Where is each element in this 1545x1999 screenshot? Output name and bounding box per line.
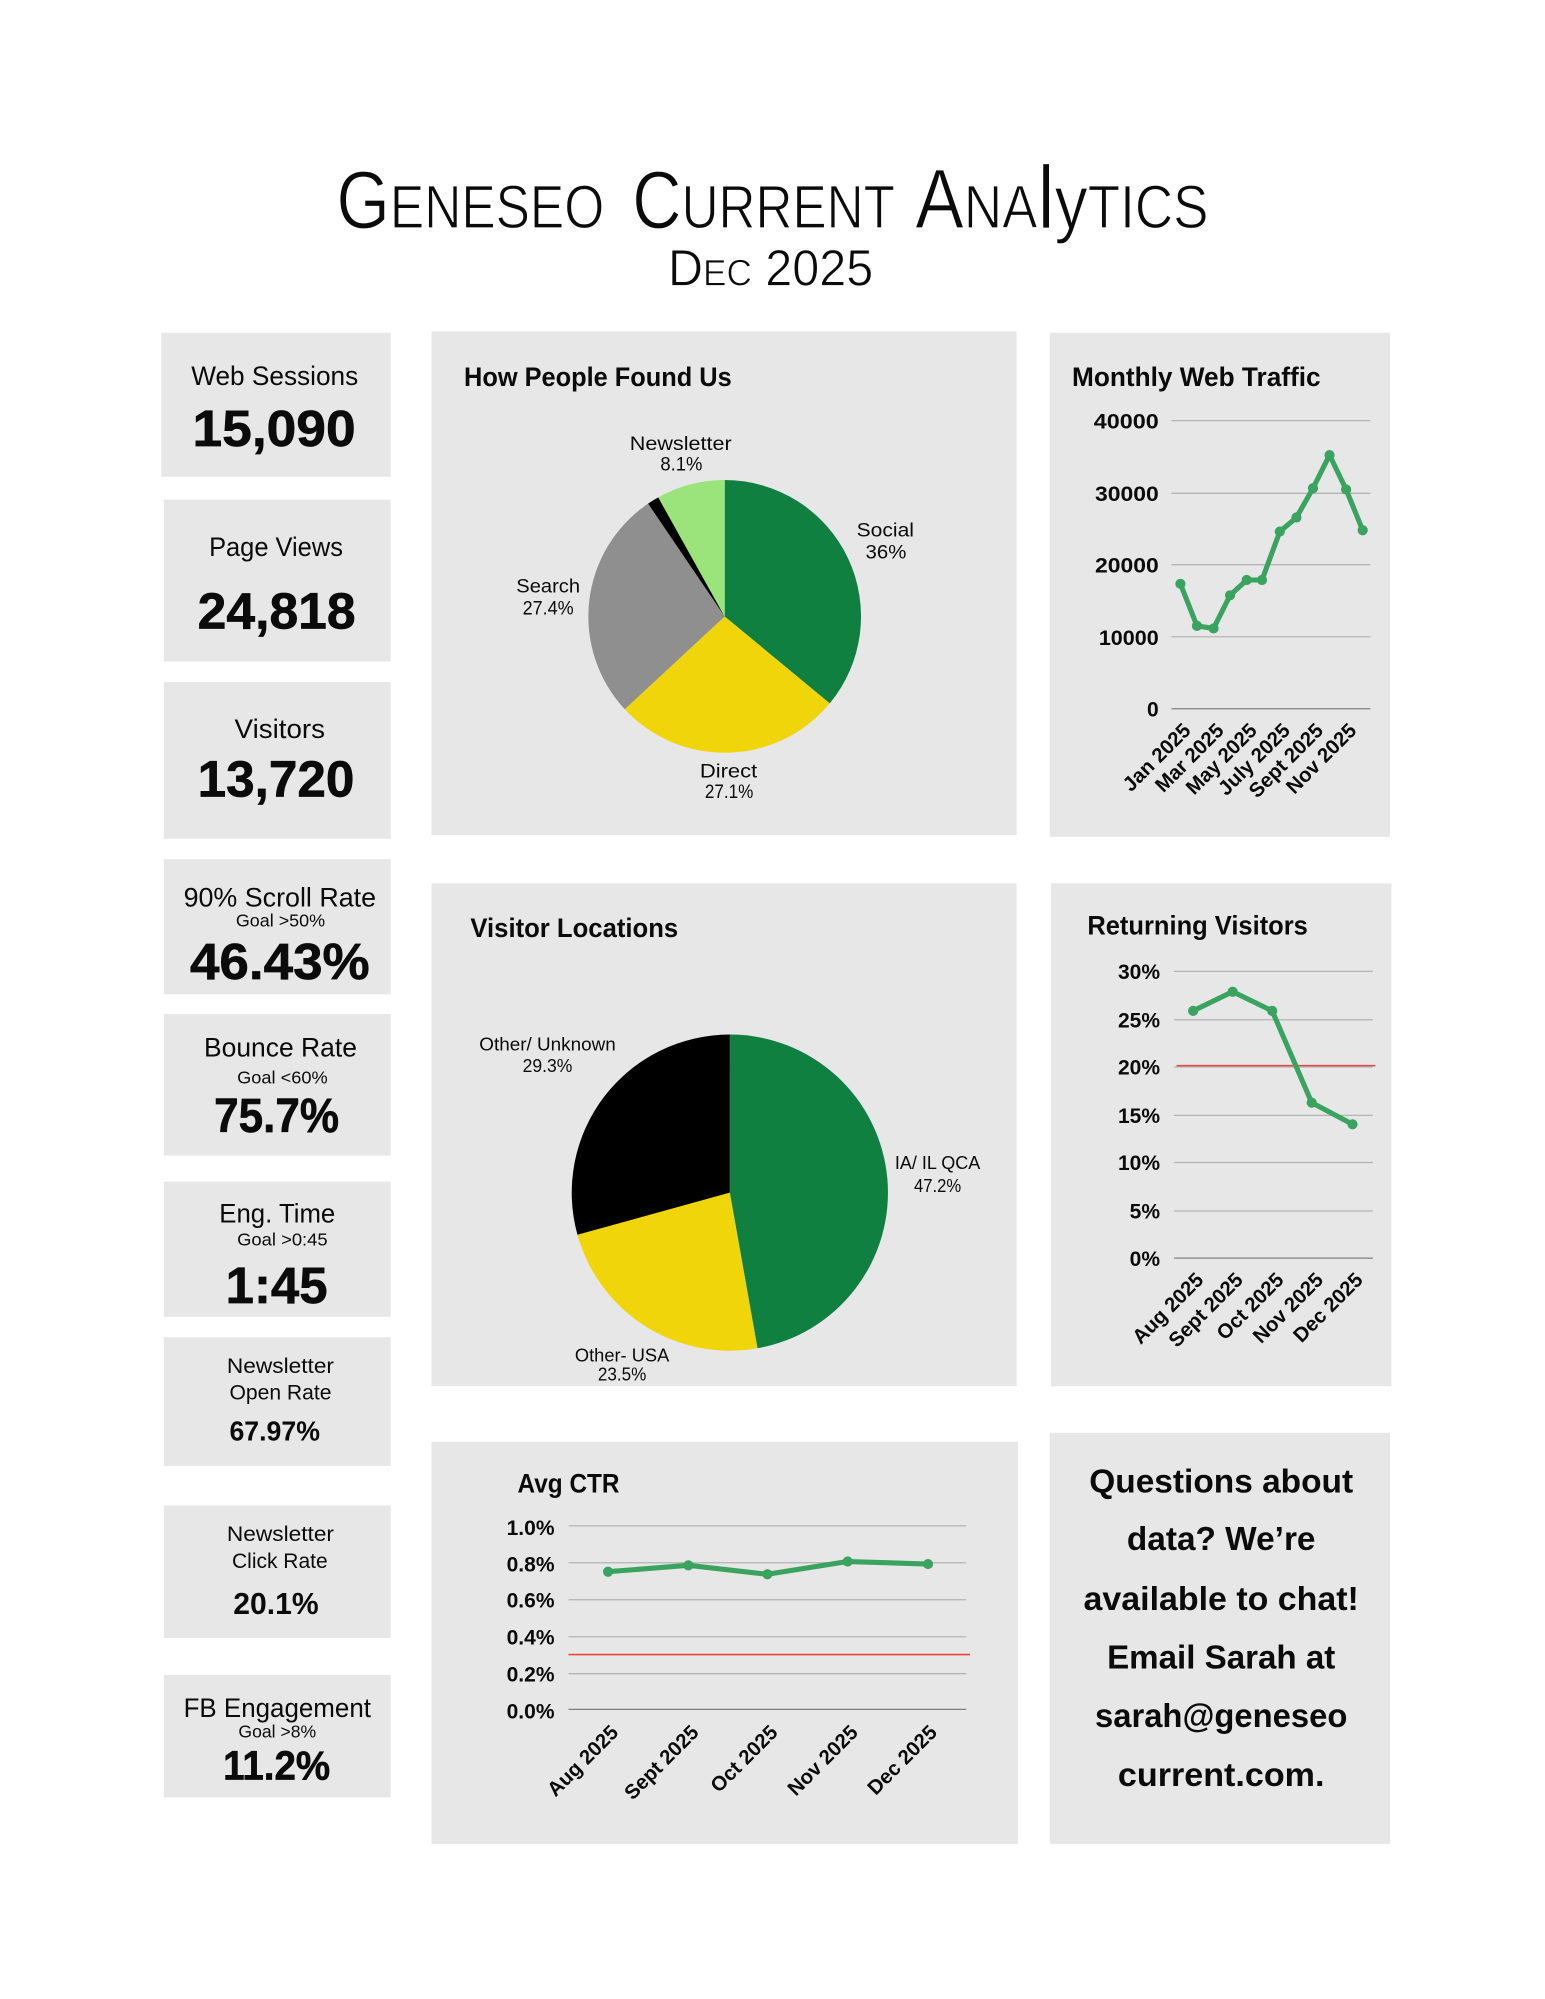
line chart: returning visitors: 20%: [1118, 1057, 1160, 1080]
line chart: monthly traffic: Sept 2025: [1245, 720, 1328, 802]
line chart: average CTR: 0.0%: [507, 1700, 555, 1723]
line chart: average CTR: 0.6%: [507, 1589, 555, 1612]
heading: Returning Visitors: [1087, 910, 1308, 940]
pie labels: 8.1%: [660, 453, 702, 475]
panel: questions callout: Questions about: [1089, 1464, 1353, 1501]
line chart: returning visitors: Nov 2025: [1249, 1269, 1328, 1348]
pie labels: [479, 1033, 981, 1385]
panel: questions callout: sarah@geneseo: [1095, 1698, 1347, 1735]
panel: bounce rate: 75.7%: [214, 1089, 339, 1143]
panel: page views: Page Views: [209, 532, 343, 562]
pie labels: [516, 433, 914, 803]
line chart: monthly traffic: 0: [1147, 698, 1159, 721]
pie labels: 36%: [866, 541, 906, 563]
panel: FB engagement: 11.2%: [223, 1742, 330, 1788]
line chart: monthly traffic: July 2025: [1214, 720, 1295, 800]
subtitle: DEC 2025: [668, 240, 873, 297]
panel: visitors: [164, 682, 391, 839]
pie labels: Other/ Unknown: [479, 1033, 616, 1054]
panel: engagement time: [164, 1182, 391, 1317]
line chart: monthly traffic: 20000: [1095, 554, 1159, 577]
line chart: monthly traffic: 30000: [1095, 483, 1159, 506]
panel: questions callout: [1050, 1433, 1390, 1844]
line chart: average CTR: Sept 2025: [621, 1722, 703, 1804]
pie labels: Search: [516, 576, 580, 598]
line chart: monthly traffic: Jan 2025: [1119, 720, 1195, 796]
pie chart: traffic sources: [588, 480, 861, 753]
panel: monthly web traffic: [1050, 333, 1390, 837]
line chart: average CTR: Dec 2025: [864, 1722, 942, 1800]
pie labels: 47.2%: [914, 1175, 961, 1196]
title: CURRENT: [632, 155, 895, 246]
panel: newsletter click rate: [164, 1505, 391, 1638]
pie labels: Newsletter: [630, 433, 732, 455]
line chart: average CTR: [507, 1517, 970, 1804]
heading: How People Found Us: [464, 362, 732, 392]
panel: scroll rate: Goal >50%: [236, 911, 325, 931]
line chart: returning visitors: 5%: [1130, 1201, 1160, 1224]
panel: engagement time: Goal >0:45: [237, 1229, 328, 1249]
title: [337, 147, 1208, 247]
line chart: average CTR: Nov 2025: [784, 1722, 863, 1800]
panel: newsletter click rate: 20.1%: [233, 1587, 319, 1621]
line chart: average CTR: 0.4%: [507, 1626, 555, 1649]
pie labels: IA/ IL QCA: [895, 1152, 981, 1173]
line chart: returning visitors: 25%: [1118, 1009, 1160, 1032]
line chart: returning visitors: 15%: [1118, 1105, 1160, 1128]
panel: newsletter click rate: Newsletter: [227, 1523, 334, 1546]
panel: scroll rate: [164, 859, 391, 994]
pie labels: 27.4%: [523, 597, 574, 619]
pie labels: 27.1%: [705, 781, 753, 803]
line chart: average CTR: 0.2%: [507, 1663, 555, 1686]
panel: how people found us: [432, 331, 1017, 835]
line chart: average CTR: 0.8%: [507, 1554, 555, 1577]
panel: scroll rate: 90% Scroll Rate: [184, 882, 376, 912]
line chart: monthly traffic: Nov 2025: [1282, 720, 1361, 798]
panel: newsletter open rate: [164, 1337, 391, 1466]
line chart: returning visitors: [1118, 961, 1375, 1352]
title: ANAlyTICS: [915, 147, 1208, 247]
panel: engagement time: Eng. Time: [219, 1198, 335, 1228]
pie labels: Direct: [700, 761, 758, 783]
line chart: returning visitors: 10%: [1118, 1152, 1160, 1175]
panel: questions callout: current.com.: [1118, 1757, 1324, 1794]
line chart: monthly traffic: Mar 2025: [1151, 720, 1229, 797]
line chart: returning visitors: 30%: [1118, 961, 1160, 984]
panel: visitors: 13,720: [198, 751, 354, 808]
line chart: returning visitors: Dec 2025: [1289, 1269, 1368, 1347]
panel: newsletter open rate: Open Rate: [229, 1382, 331, 1405]
panel: FB engagement: [164, 1675, 391, 1797]
line chart: monthly traffic: [1094, 410, 1370, 802]
panel: FB engagement: FB Engagement: [184, 1693, 372, 1723]
pie labels: 23.5%: [598, 1364, 646, 1385]
line chart: average CTR: Oct 2025: [707, 1722, 782, 1797]
panel: average CTR: [432, 1442, 1018, 1844]
panel: questions callout: available to chat!: [1084, 1581, 1359, 1618]
line chart: returning visitors: Oct 2025: [1213, 1269, 1288, 1345]
panel: visitor locations: [432, 883, 1017, 1386]
panel: FB engagement: Goal >8%: [238, 1721, 316, 1741]
panel: page views: 24,818: [198, 582, 356, 639]
line chart: returning visitors: Sept 2025: [1165, 1269, 1248, 1352]
panel: engagement time: 1:45: [226, 1257, 328, 1314]
panel: bounce rate: Bounce Rate: [204, 1033, 357, 1063]
panel: newsletter click rate: Click Rate: [232, 1550, 328, 1573]
pie labels: Other- USA: [575, 1344, 670, 1365]
panel: web sessions: Web Sessions: [191, 361, 358, 391]
heading: Monthly Web Traffic: [1072, 362, 1321, 392]
pie chart: visitor locations: [572, 1035, 888, 1351]
pie labels: 29.3%: [523, 1055, 572, 1076]
panel: bounce rate: [164, 1014, 391, 1156]
panel: bounce rate: Goal <60%: [237, 1068, 328, 1088]
panel: visitors: Visitors: [235, 714, 325, 744]
heading: Avg CTR: [518, 1469, 620, 1499]
panel: page views: [164, 500, 391, 662]
title: GENESEO: [337, 155, 604, 246]
line chart: monthly traffic: May 2025: [1182, 720, 1262, 799]
panel: questions callout: Email Sarah at: [1107, 1640, 1335, 1677]
panel: web sessions: 15,090: [193, 400, 356, 457]
line chart: average CTR: Aug 2025: [543, 1722, 623, 1801]
panel: questions callout: data? We’re: [1127, 1521, 1316, 1558]
line chart: monthly traffic: 10000: [1099, 627, 1159, 650]
line chart: monthly traffic: 40000: [1094, 410, 1159, 433]
panel: web sessions: [161, 333, 391, 477]
panel: newsletter open rate: Newsletter: [227, 1355, 334, 1378]
panel: returning visitors: [1051, 883, 1391, 1386]
heading: Visitor Locations: [470, 913, 678, 943]
line chart: returning visitors: Aug 2025: [1129, 1269, 1208, 1349]
line chart: returning visitors: 0%: [1130, 1248, 1160, 1271]
panel: newsletter open rate: 67.97%: [229, 1415, 320, 1446]
pie labels: Social: [857, 520, 914, 542]
panel: scroll rate: 46.43%: [190, 933, 370, 990]
line chart: average CTR: 1.0%: [507, 1517, 555, 1540]
